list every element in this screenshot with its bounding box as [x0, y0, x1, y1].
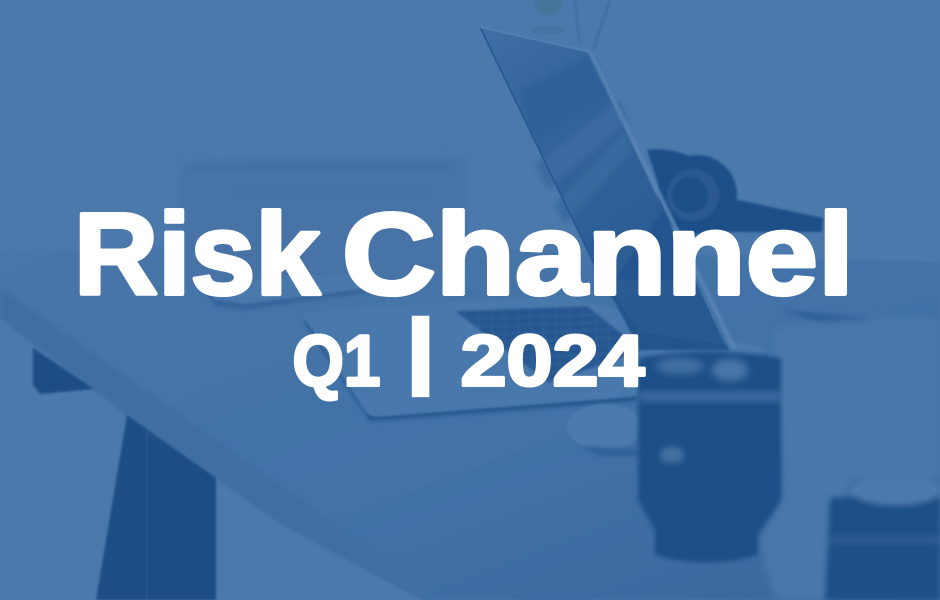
stack of papers [178, 155, 467, 285]
title: Risk [74, 189, 320, 319]
white cup [758, 318, 940, 600]
plant stems and leaves [530, 0, 610, 50]
laptop base shadow [303, 320, 640, 421]
paper at right edge [781, 310, 869, 326]
laptop screen [480, 27, 725, 345]
subtitle: 2024 [460, 322, 644, 402]
subtitle: | [410, 305, 431, 393]
title [74, 189, 854, 319]
desk legs [33, 348, 216, 600]
hinge [600, 280, 730, 350]
desk surface [0, 248, 940, 600]
headphones [647, 149, 823, 235]
title: Channel [342, 189, 854, 319]
mouse [567, 404, 643, 450]
camera lens mug [638, 352, 781, 562]
desk front edge shading [0, 287, 430, 600]
keyboard [455, 306, 642, 383]
laptop base [301, 295, 770, 417]
subtitle [292, 305, 644, 402]
tablet under laptop [200, 278, 372, 310]
second dark lens [825, 475, 940, 600]
subtitle: Q1 [292, 322, 380, 402]
